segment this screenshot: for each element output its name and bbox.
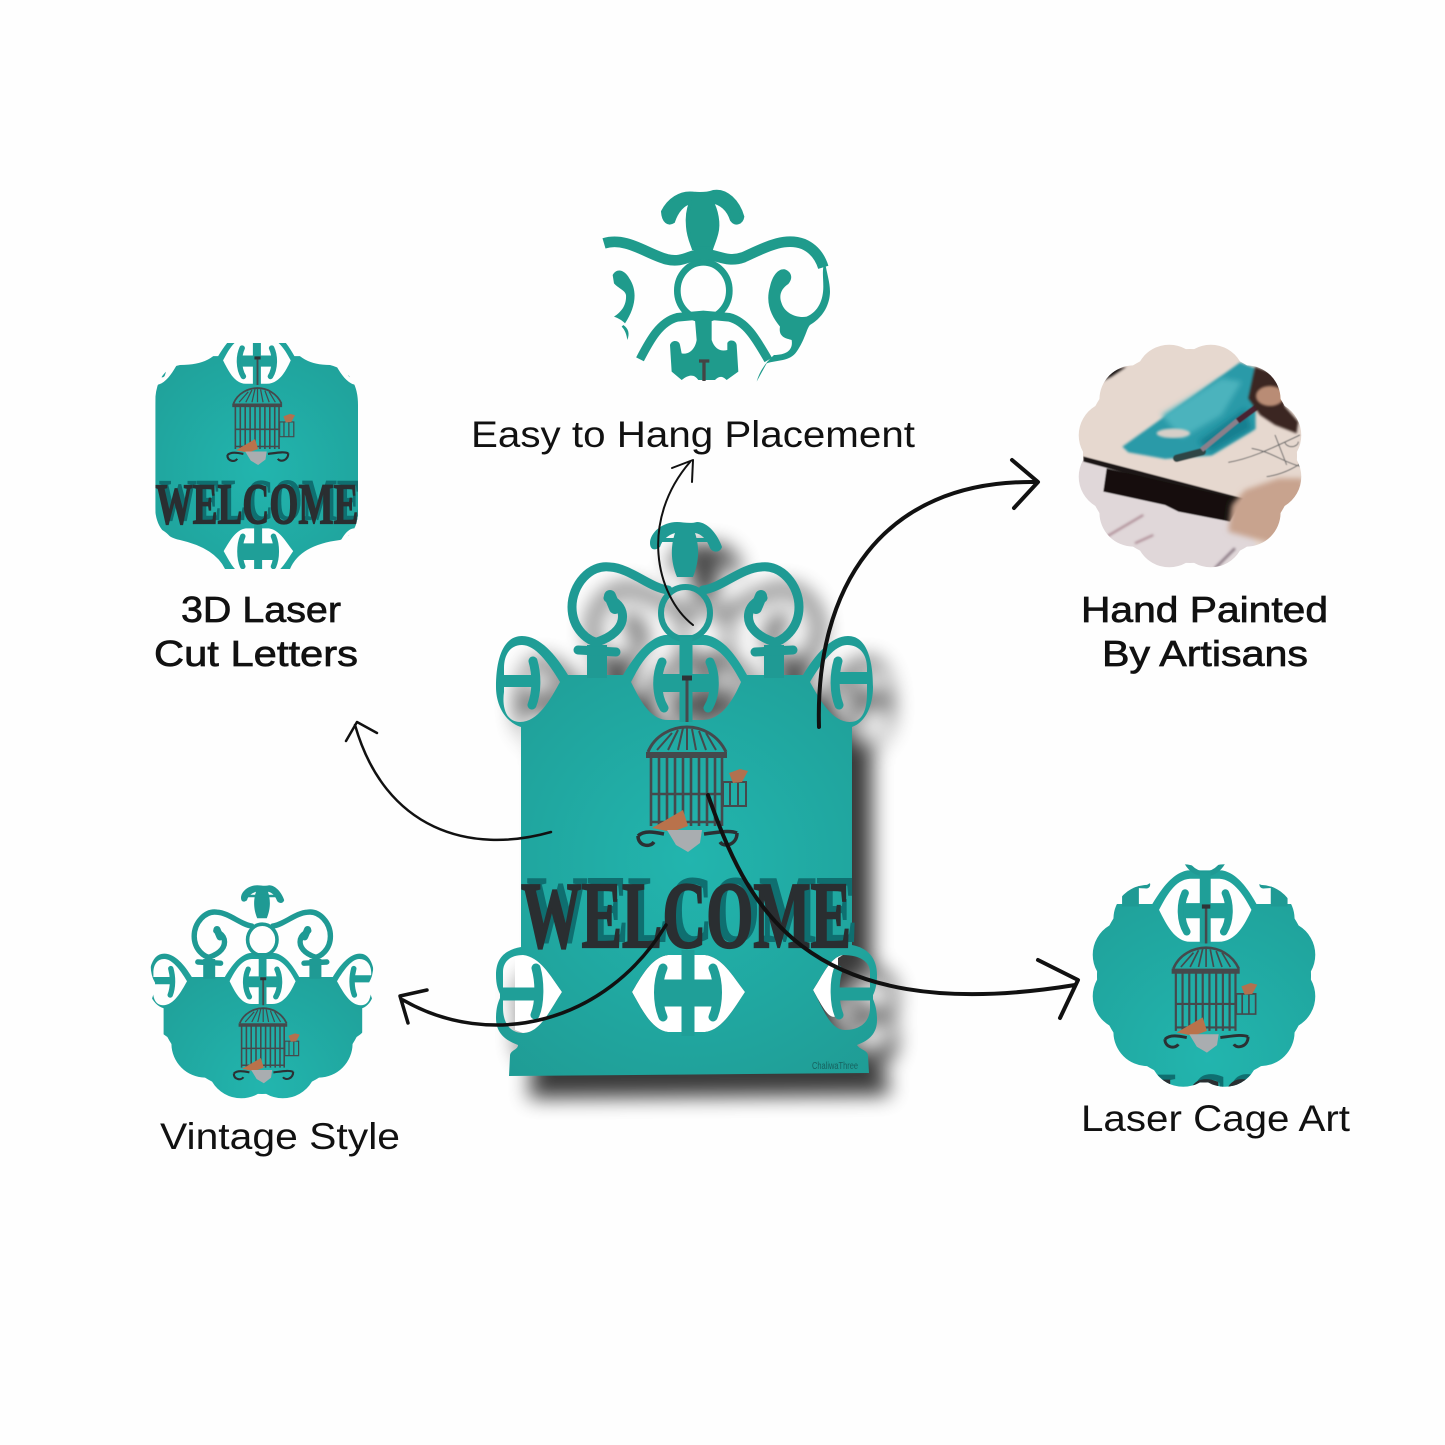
- icon: bird cage: [638, 677, 748, 852]
- heading: 3D Laser Cut Letters: 3D Laser: [181, 589, 341, 630]
- panel: vintage style medallion: [150, 885, 374, 1098]
- panel: laser cage art medallion: [1092, 864, 1316, 1087]
- arrow: sign to easy to hang: [658, 460, 693, 625]
- arrow: sign to laser cage art: [708, 795, 1078, 1018]
- heading: Vintage Style: Vintage Style: [160, 1116, 400, 1157]
- panel: hand painted medallion: [1078, 344, 1302, 568]
- heading: Laser Cage Art: Laser Cage Art: [1081, 1098, 1351, 1139]
- panel: easy to hang medallion: [604, 191, 830, 382]
- arrow: sign to hand painted: [819, 460, 1038, 727]
- heading: Hand Painted By Artisans: [1081, 589, 1328, 674]
- heading: Hand Painted By Artisans: By Artisans: [1102, 633, 1308, 674]
- arrow: sign to vintage style: [400, 925, 666, 1025]
- heading: Hand Painted By Artisans: Hand Painted: [1081, 589, 1328, 630]
- arrow: sign to 3D letters: [346, 722, 551, 840]
- panel: central welcome sign: [496, 522, 877, 1076]
- heading: 3D Laser Cut Letters: Cut Letters: [154, 633, 358, 674]
- heading: 3D Laser Cut Letters: [154, 589, 358, 674]
- maker signature: ChaliwaThree: [812, 1061, 858, 1072]
- welcome lettering: [521, 858, 857, 968]
- heading: Easy to Hang Placement: Easy to Hang Placement: [471, 414, 916, 455]
- panel: 3D laser cut letters medallion: [155, 343, 358, 569]
